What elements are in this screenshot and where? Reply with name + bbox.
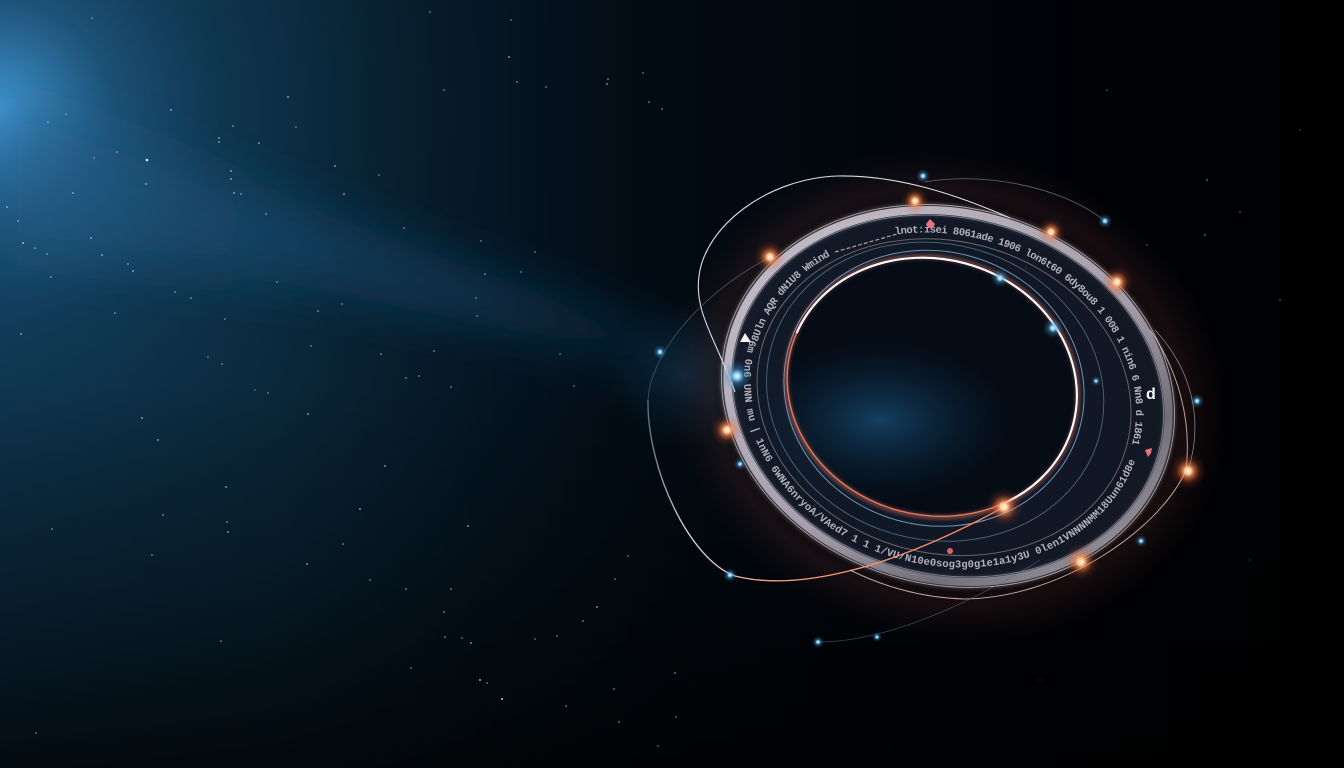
ring halo: warm glow around the outer ring — [609, 86, 1287, 706]
marker: white triangle — [740, 333, 751, 342]
orbit: upper-right arc — [925, 179, 1105, 221]
ring text: lower arc: 6m 0n6 UNN mu | 1nN6 6WNA6nryoA/VAed7 1 1 1/VU/N10e0sog3g0g1e1a1y3U 0len1VNNNNMM18Uun61d8e — [744, 341, 1134, 570]
inner ring: white and orange arcs — [757, 224, 1107, 550]
orbit: lower-left sweep into orange — [648, 400, 1004, 581]
orbit: right outer arc — [1155, 330, 1195, 471]
marker: red tag top — [926, 219, 935, 228]
ring text: upper arc: 8Uln AQR dN1U8 Wmind lnot:isei 8061ade 1906 lon6t60 6dy8ou8 1 008 1 nin6 6 Nn8 d 1861 — [752, 225, 1144, 444]
outer luminous band — [678, 155, 1218, 637]
orbit: faint left arc — [648, 257, 770, 400]
orbit: upper-left sweep — [698, 176, 1010, 392]
nodes: orange glowing points — [711, 187, 1206, 580]
inner dark void — [758, 226, 1106, 548]
marker: red tag right — [1145, 448, 1152, 457]
dashed lead line on ring — [835, 234, 897, 252]
marker: red tag bottom — [947, 548, 953, 554]
orbit: lower-right sweep — [850, 330, 1187, 599]
thin guide rings — [721, 198, 1167, 597]
central blue glow — [750, 342, 1010, 498]
nodes: blue glowing points — [653, 169, 1204, 648]
ring: annulus tint — [683, 163, 1207, 629]
marker: letter on right of ring: d — [1146, 386, 1156, 403]
orbit: faint lower arc — [818, 560, 1040, 642]
